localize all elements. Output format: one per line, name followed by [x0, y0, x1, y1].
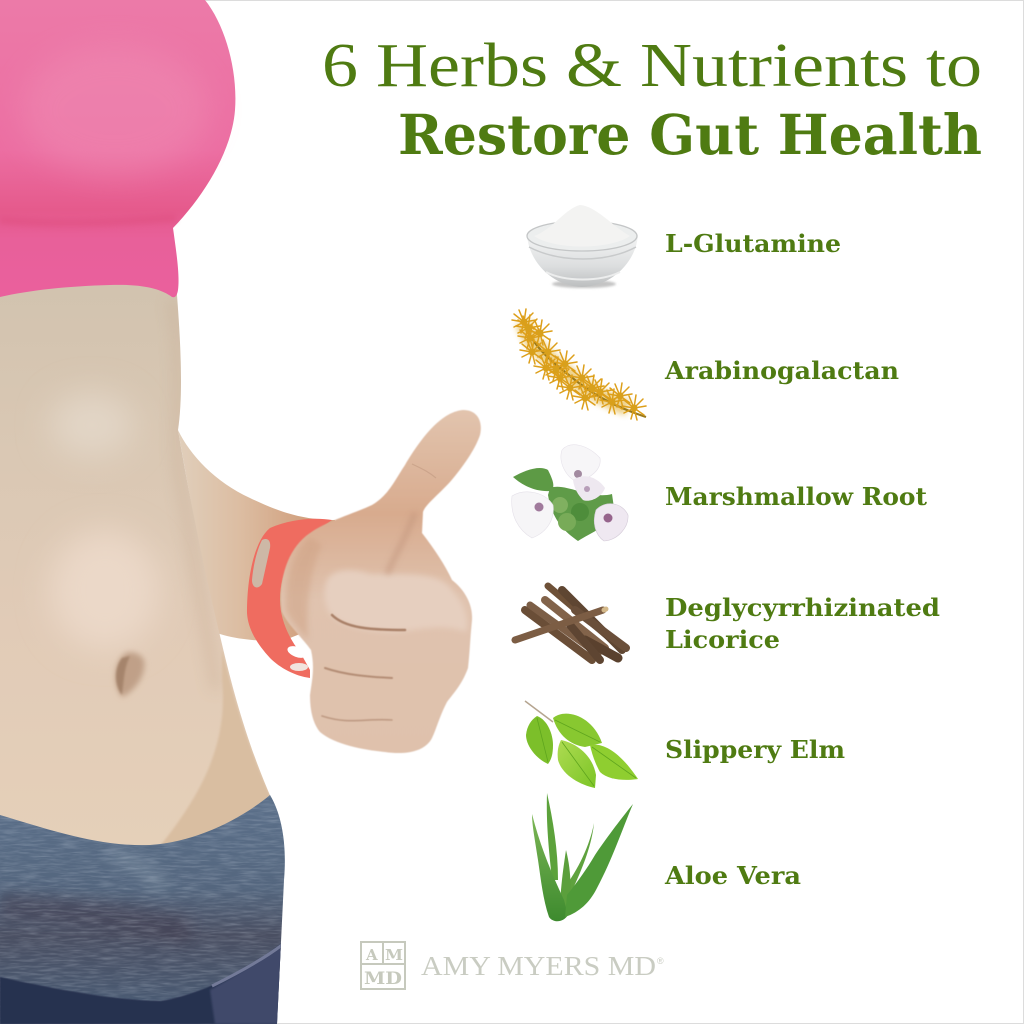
logo monogram [361, 942, 405, 989]
top finger [324, 570, 467, 632]
icon: licorice sticks [515, 586, 626, 660]
wristband sensor [252, 539, 270, 587]
logo monogram: M [385, 946, 403, 964]
title [322, 32, 982, 167]
label: L-Glutamine [665, 229, 841, 258]
waistband [0, 795, 285, 1024]
item: Arabinogalactan [512, 309, 899, 420]
icon: marshmallow flowers [512, 445, 628, 541]
registered mark: ® [657, 956, 664, 966]
sports bra [0, 0, 235, 297]
title line two: Restore Gut Health [398, 102, 982, 167]
torso shading [50, 392, 270, 844]
item: Deglycyrrhizinated Licorice [515, 586, 940, 660]
label: Aloe Vera [664, 861, 801, 890]
bra highlights [0, 45, 210, 223]
item: Marshmallow Root [512, 445, 927, 541]
label: Marshmallow Root [665, 482, 927, 511]
wristband holes [286, 644, 308, 671]
torso [0, 270, 272, 850]
arm [178, 430, 335, 641]
icon: elm leaves [525, 701, 638, 788]
icon: aloe leaves [532, 793, 633, 921]
icon: bowl of powder [527, 205, 638, 288]
logo monogram: MD [364, 969, 402, 989]
waistband texture [0, 790, 300, 1024]
navel [116, 652, 144, 697]
title line one: 6 Herbs & Nutrients to [322, 32, 982, 100]
hand [281, 410, 481, 753]
logo wordmark: AMY MYERS MD [421, 951, 656, 981]
item: Slippery Elm [525, 701, 845, 788]
icon: larch branch [512, 309, 646, 420]
logo monogram: A [365, 946, 378, 964]
right waist panel [160, 650, 275, 846]
finger creases [322, 515, 414, 721]
wristband [247, 519, 332, 678]
label: Deglycyrrhizinated [665, 593, 940, 622]
photo: woman's torso with thumbs up [0, 0, 481, 1024]
item: Aloe Vera [532, 793, 801, 921]
logo: Amy Myers MD [361, 942, 664, 989]
label line two: Licorice [665, 625, 780, 654]
pants lower band [0, 943, 282, 1024]
wrist shadow [286, 537, 322, 640]
label: Slippery Elm [665, 735, 845, 764]
label: Arabinogalactan [664, 356, 899, 385]
item: L-Glutamine [527, 205, 841, 288]
thumb crease [412, 464, 436, 478]
